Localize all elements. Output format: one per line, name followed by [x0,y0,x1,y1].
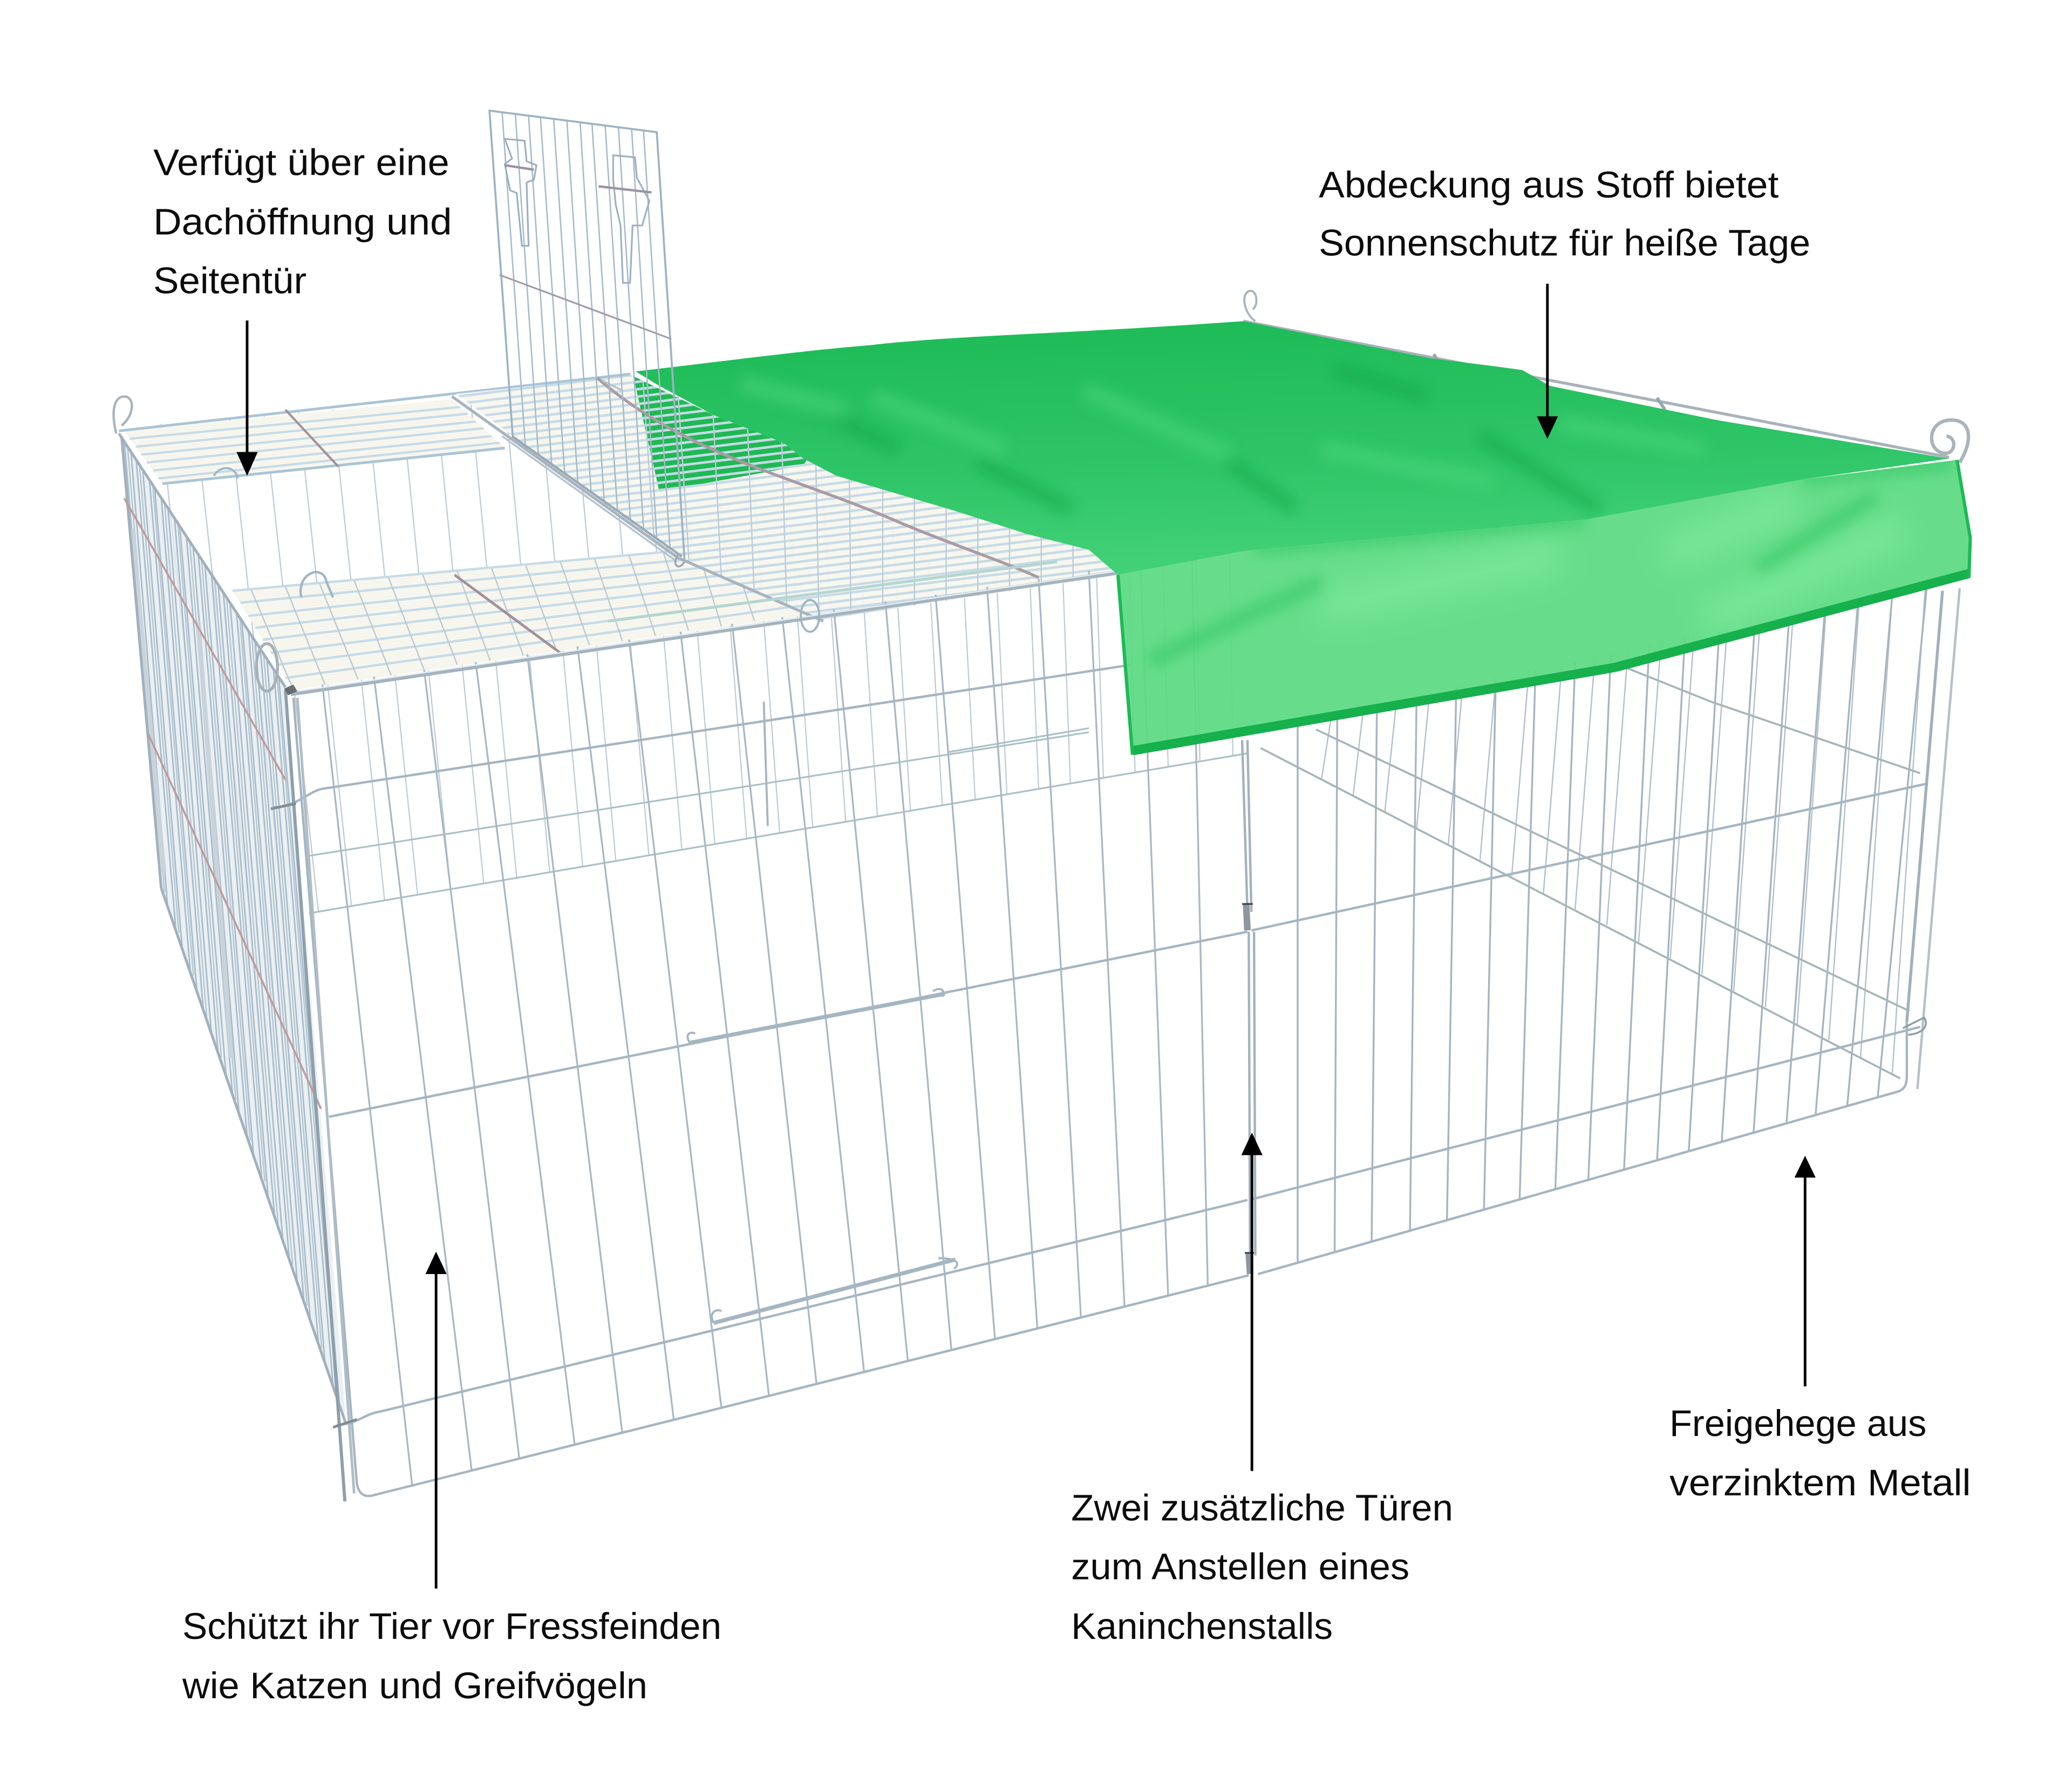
middle post with joints [1242,740,1256,1274]
callout: predators text [182,1605,721,1706]
right panel wires [1298,588,1927,1262]
front corner post [271,690,357,1501]
illustration: wire enclosure [119,332,1960,1501]
callout: roof opening text: Dachöffnung und [153,201,452,243]
callout: predators text: wie Katzen und Greifvögeln [182,1665,648,1706]
callout: fabric cover text: Sonnenschutz für heiße Tage [1319,222,1810,264]
door frame [489,111,685,559]
roof mesh: back strip [119,374,630,484]
right corner post [1907,591,1942,1022]
right side rear wires [1321,587,1925,1073]
back panel bottom rails [305,728,1248,913]
right side rear rails [1260,668,1920,1078]
front left panel wires [323,556,1208,1487]
hinge ring [801,600,819,632]
inner post and latch [764,702,768,826]
door latch right [613,155,649,283]
wrinkles on front drop [1150,462,1953,661]
door latch rods [505,165,651,193]
sun cover cloth [621,311,1982,754]
front top rail [291,572,1118,694]
door bottom bar [512,436,682,556]
callout: roof opening text: Seitentür [153,260,306,302]
callout: additional doors text: Kaninchenstalls [1071,1605,1333,1647]
roof mesh: right of door, including green cloth section below the mesh [456,376,1118,620]
cloth top surface [636,321,1949,575]
open roof door [489,111,685,567]
wrinkles on top surface [740,370,1705,509]
door hinge hook [676,555,685,567]
back panel wires [161,332,1233,932]
callout: galvanized metal text [1669,1403,1971,1503]
roof bars [452,378,1057,621]
corner bracket [284,685,297,695]
corner ring [256,644,277,691]
corner hooks [114,291,1968,462]
arrow: additional doors [1242,1133,1263,1471]
callout: roof opening text [153,142,452,302]
callout: predators text: Schützt ihr Tier vor Fressfeinden [182,1605,721,1647]
door latch left [505,139,536,246]
back top rail behind cloth [1243,321,1949,457]
callout: additional doors text: zum Anstellen eines [1071,1546,1409,1588]
arrow: galvanized metal [1795,1156,1816,1386]
left side panel [119,433,346,1425]
arrow: roof opening [236,321,258,476]
callout: fabric cover text [1319,164,1810,264]
rail clips [1434,354,1665,410]
cloth front drop [1118,460,1970,754]
cloth side edges [1118,460,1970,754]
U-hook [301,572,333,597]
callout: additional doors text: Zwei zusätzliche Türen [1071,1487,1453,1529]
door wires [502,112,670,547]
callout: additional doors text [1071,1487,1453,1647]
small hook [214,468,238,479]
roof mesh: front strip [233,550,810,690]
callout: fabric cover text: Abdeckung aus Stoff bietet [1319,164,1778,206]
door cross bar [500,275,671,339]
front left panel rails and frame [274,665,1249,1496]
right panel rails [1249,784,1927,1274]
callout: roof opening text: Verfügt über eine [153,142,449,183]
cloth hem [1133,574,1969,751]
arrow: fabric cover [1537,284,1558,439]
arrow: predators [426,1251,447,1589]
callout: galvanized metal text: Freigehege aus [1669,1403,1926,1444]
callout: galvanized metal text: verzinktem Metall [1669,1462,1971,1503]
roof hardware [214,468,819,691]
